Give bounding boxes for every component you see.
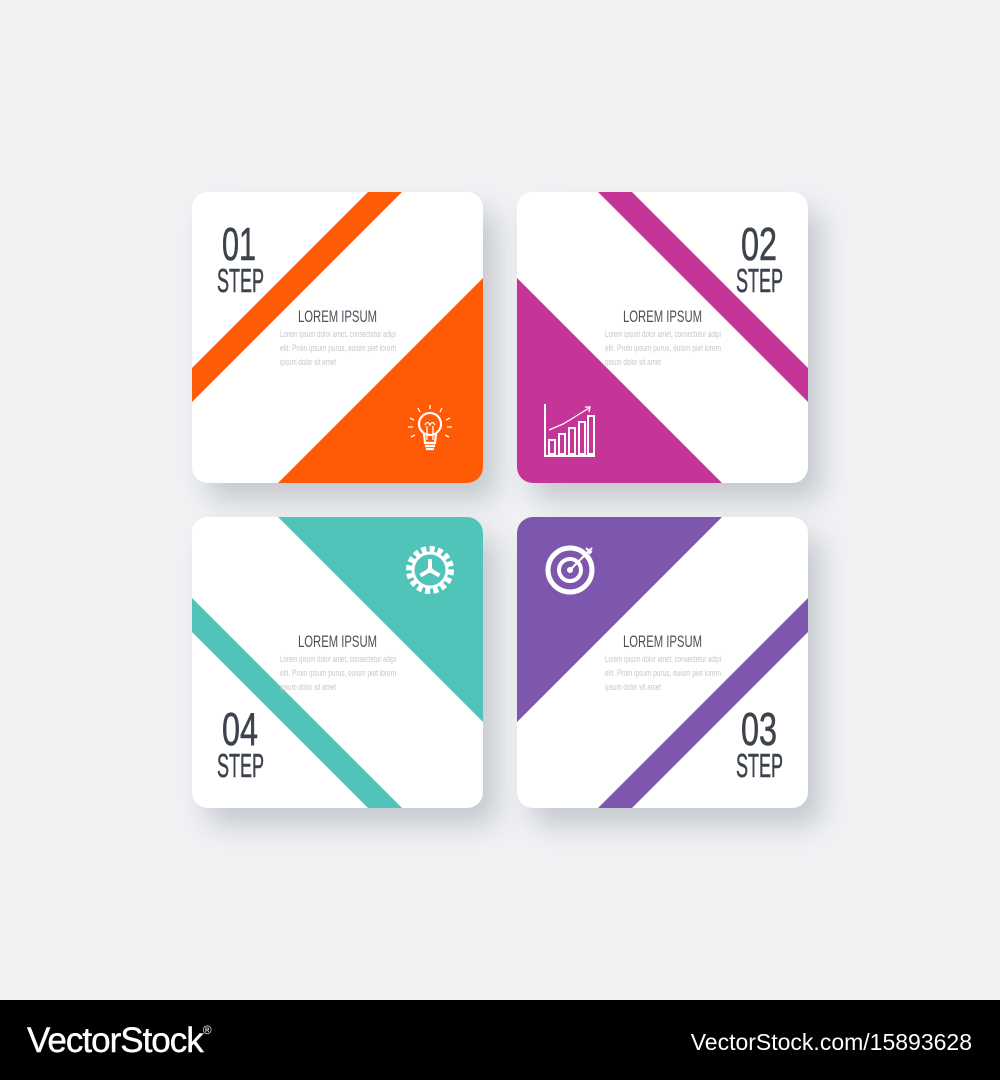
footer bar <box>0 1000 1000 1080</box>
body text <box>605 329 721 367</box>
body text: Lorem ipsum dolor amet, consectetur adipi <box>280 329 396 339</box>
body text: Lorem ipsum dolor amet, consectetur adipi <box>605 654 721 664</box>
body text: ipsum dolor sit amet <box>280 357 336 367</box>
body text: Lorem ipsum dolor amet, consectetur adipi <box>280 654 396 664</box>
panel: step 02 <box>517 192 822 501</box>
label STEP: STEP <box>736 747 783 784</box>
body text: elit. Proin ipsum purus, euism piet lorem <box>280 668 396 678</box>
body text: elit. Proin ipsum purus, euism piet lorem <box>280 343 396 353</box>
body text: ipsum dolor sit amet <box>280 682 336 692</box>
icon: target <box>548 548 592 592</box>
heading: LOREM IPSUM <box>623 307 702 326</box>
body text <box>280 654 396 692</box>
footer brand: ® <box>203 1023 212 1037</box>
panel: step 01 <box>192 192 497 501</box>
icon: lightbulb <box>408 405 452 449</box>
number 02: 02 <box>741 218 777 270</box>
footer url: VectorStock.com/15893628 <box>691 1029 972 1055</box>
panel: step 03 <box>517 517 822 826</box>
label STEP: STEP <box>217 747 264 784</box>
body text: Lorem ipsum dolor amet, consectetur adipi <box>605 329 721 339</box>
icon: gear <box>409 549 451 591</box>
panel: step 04 <box>192 517 497 826</box>
number 01: 01 <box>222 218 256 270</box>
body text <box>605 654 721 692</box>
number 04: 04 <box>222 703 258 755</box>
body text: ipsum dolor sit amet <box>605 357 661 367</box>
icon: bar chart <box>545 404 595 456</box>
body text: ipsum dolor sit amet <box>605 682 661 692</box>
heading: LOREM IPSUM <box>298 632 377 651</box>
body text: elit. Proin ipsum purus, euism piet lorem <box>605 668 721 678</box>
heading: LOREM IPSUM <box>298 307 377 326</box>
number 03: 03 <box>741 703 777 755</box>
body text <box>280 329 396 367</box>
label STEP: STEP <box>736 262 783 299</box>
body text: elit. Proin ipsum purus, euism piet lorem <box>605 343 721 353</box>
label STEP: STEP <box>217 262 264 299</box>
footer brand: VectorStock <box>27 1021 203 1060</box>
heading: LOREM IPSUM <box>623 632 702 651</box>
